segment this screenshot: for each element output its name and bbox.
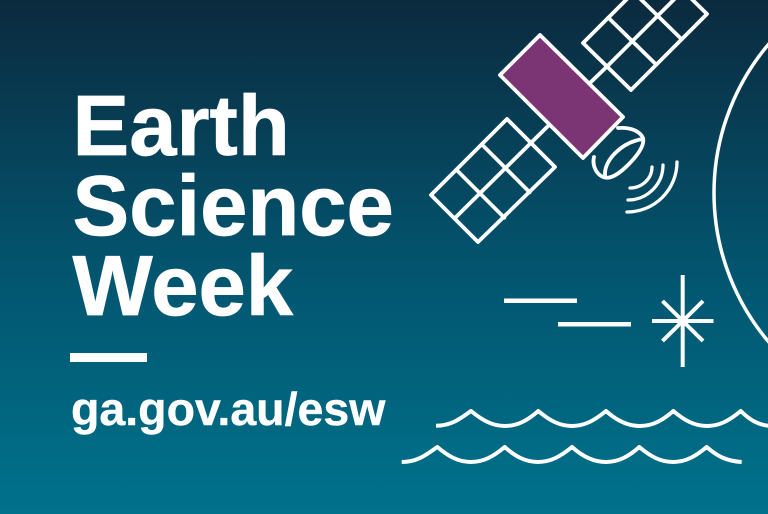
dashes	[504, 301, 631, 324]
title: Science	[72, 159, 394, 254]
title underline	[70, 353, 147, 362]
planet outline	[714, 0, 768, 423]
signal waves	[627, 162, 677, 212]
icon: star	[652, 275, 714, 367]
upper solar panel	[583, 0, 707, 90]
upper wave	[436, 411, 768, 426]
title: Week	[72, 239, 294, 334]
satellite dish	[593, 128, 643, 178]
title: Earth	[72, 79, 290, 174]
title	[72, 79, 394, 334]
satellite body	[500, 35, 623, 158]
waves	[402, 411, 768, 462]
lower wave	[402, 447, 742, 462]
lower solar panel	[431, 119, 555, 242]
website address: ga.gov.au/esw	[71, 383, 386, 435]
icon: satellite	[431, 0, 707, 242]
